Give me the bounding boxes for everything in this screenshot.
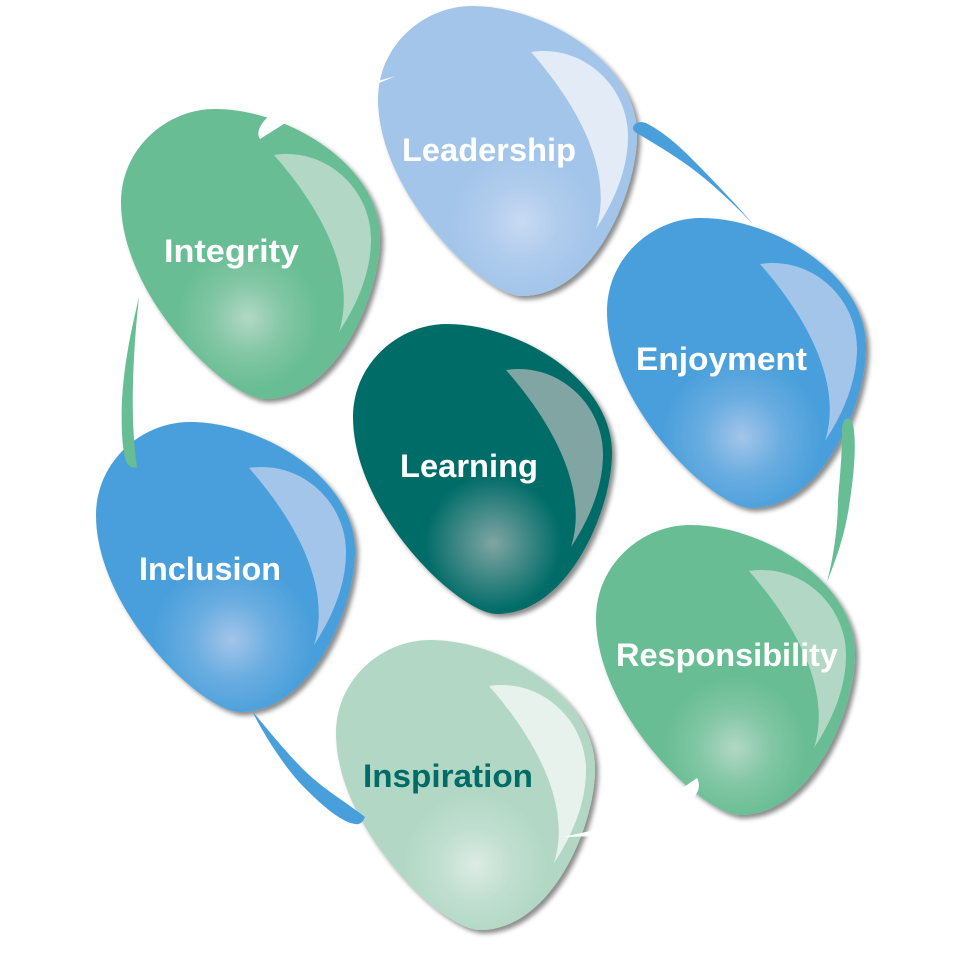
label: Enjoyment: Enjoyment xyxy=(636,341,807,377)
connector: Inclusion to Inspiration xyxy=(252,711,365,824)
blob: Enjoyment xyxy=(607,218,866,517)
label: Responsibility: Responsibility xyxy=(616,637,838,673)
notch: Integrity xyxy=(258,112,290,139)
connector: Enjoyment to Responsibility xyxy=(827,418,855,582)
label: Integrity: Integrity xyxy=(164,233,299,269)
connector: Integrity to Inclusion xyxy=(122,297,139,468)
blob: Inclusion xyxy=(96,422,355,720)
blob: Leadership xyxy=(378,6,637,296)
label: Leadership: Leadership xyxy=(402,132,576,168)
blob: Inspiration xyxy=(336,640,595,937)
label: Learning: Learning xyxy=(400,448,538,484)
notch: Leadership xyxy=(375,76,396,84)
blob: Responsibility xyxy=(596,525,855,820)
label: Inspiration: Inspiration xyxy=(363,758,533,794)
blob: Integrity xyxy=(121,109,380,399)
notch: Responsibility xyxy=(671,778,699,812)
label: Inclusion: Inclusion xyxy=(139,551,281,587)
notch: Inspiration xyxy=(563,826,602,837)
blob: Learning xyxy=(353,324,612,614)
connector: Leadership to Enjoyment xyxy=(633,122,753,224)
